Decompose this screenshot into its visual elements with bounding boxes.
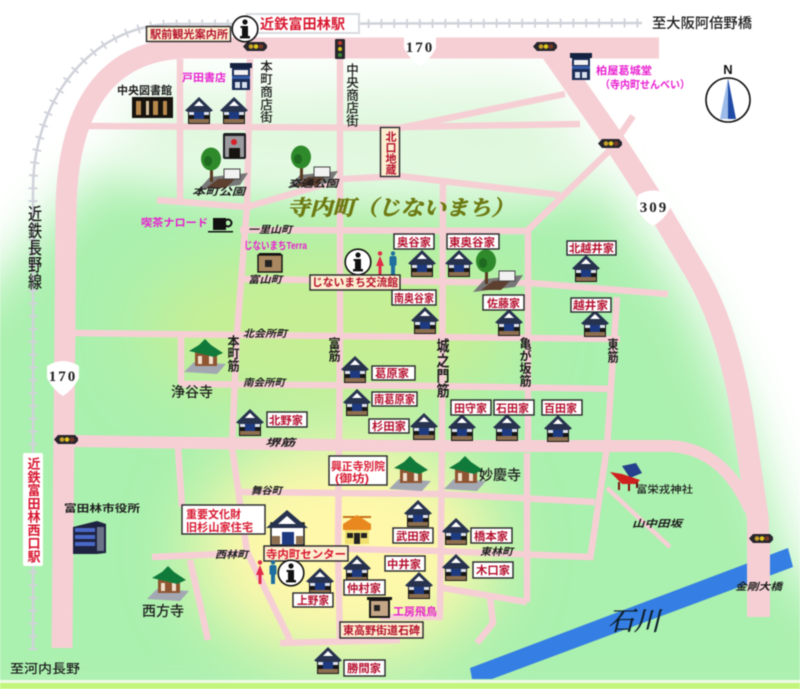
- cafe: [141, 216, 233, 232]
- street labels: central blocks: 富筋: [327, 336, 341, 363]
- road network: [62, 48, 758, 648]
- label: Nakai: 中井家: [387, 557, 421, 571]
- icon: information, exchange hall: [345, 249, 371, 275]
- park: Kotsu park: 交通公園: [288, 178, 340, 190]
- label: Minami Kuzuhara: 南葛原家: [374, 392, 415, 406]
- label: Nakai: [385, 556, 425, 571]
- label: Hashimoto: 橋本家: [474, 529, 508, 543]
- houses: [185, 97, 609, 674]
- label: Tamori: 田守家: [454, 401, 487, 415]
- street labels: central blocks: 南会所町: [243, 377, 287, 389]
- park near Higashi Okutani house: [473, 250, 523, 292]
- label: Higashi Okutani: [447, 234, 499, 249]
- station label: Tondabayashi-nishiguchi: [23, 453, 43, 566]
- route shield 170 top: [404, 32, 436, 66]
- shop: Toda bookstore: 戸田書店: [182, 71, 227, 84]
- library: [117, 83, 173, 118]
- label: Katsuma: [344, 660, 385, 676]
- shop: Kashiwaya: 柏屋葛城堂: [596, 64, 652, 77]
- traffic signals: [54, 39, 773, 543]
- shop: Kashiwaya: [570, 53, 690, 91]
- street labels: central blocks: 東林町: [480, 546, 515, 558]
- label: Sato: [483, 295, 524, 310]
- title: 寺内町（じないまち）: [287, 196, 514, 220]
- shrine: Tomiebisu: 富栄戎神社: [636, 483, 693, 496]
- label: Ishida: 石田家: [496, 401, 529, 415]
- label: Sato: 佐藤家: [487, 296, 520, 310]
- library: 中央図書館: [117, 83, 172, 97]
- park: Kotsu park: [288, 146, 340, 190]
- shrine: Tomiebisu: [610, 463, 693, 496]
- label: former Sugiyama residence: 旧杉山家住宅: [186, 520, 253, 534]
- temples: Koshoji and Myokeiji: [389, 456, 486, 491]
- temple: Saihoji: 西方寺: [142, 603, 184, 619]
- icon: restrooms, center: [256, 560, 276, 584]
- label: Higashi Koya road stone: 東高野街道石碑: [343, 623, 420, 637]
- bridge label: Kongo bridge: 金剛大橋: [735, 581, 784, 593]
- icon: information, center: [278, 560, 304, 586]
- temple: Jokokuji: [171, 339, 226, 400]
- label: Okutani: 奥谷家: [397, 235, 431, 249]
- label: Hashimoto: [471, 528, 512, 543]
- label: Katsuma: 勝間家: [347, 661, 381, 675]
- destination: Kawachinagano: 至河内長野: [10, 661, 81, 676]
- icon: information, station: [232, 16, 258, 42]
- temple: Saihoji: [142, 566, 189, 619]
- label: Kiguchi: 木口家: [476, 563, 510, 577]
- label: Kitano: [267, 412, 307, 427]
- label: Minami Okutani: 南奥谷家: [394, 291, 434, 305]
- river label: Ishikawa: 石川: [608, 607, 663, 636]
- destination: Osaka Abenobashi: 至大阪阿倍野橋: [652, 15, 752, 31]
- label: Sugita: 杉田家: [372, 419, 406, 433]
- slope label: Yamanakada: 山中田坂: [632, 518, 684, 530]
- label: Koshoji betsuin: [329, 456, 387, 485]
- label: north gate jizo: [380, 128, 400, 176]
- city hall: [64, 502, 140, 554]
- name labels: houses: [267, 234, 616, 676]
- cafe: 喫茶ナロード: [141, 216, 208, 229]
- compass north arrow: [706, 62, 750, 122]
- label: Nakamura: [344, 580, 385, 595]
- label: Ishida: [494, 400, 534, 415]
- label: Higashi Koya road stone: [340, 622, 423, 638]
- park: Honmachi park: 本町公園: [192, 186, 248, 198]
- station name: Kintetsu Tondabayashi: 近鉄富田林駅: [260, 16, 345, 32]
- station tourist information label: 駅前観光案内所: [150, 27, 228, 41]
- municipal building: [223, 133, 246, 159]
- temple label: Myokeiji: 妙慶寺: [479, 467, 521, 483]
- street labels: central blocks: 北会所町: [243, 328, 289, 340]
- label: Kuzuhara: [372, 366, 415, 380]
- label: Kiguchi: [473, 562, 513, 578]
- label: Ueno: 上野家: [297, 593, 329, 607]
- park: Honmachi park: [192, 148, 248, 198]
- Jinaimachi Terra: [244, 240, 307, 272]
- street label: Chuo shopping street: 中央商店街: [344, 62, 358, 128]
- label: Nakamura: 仲村家: [347, 581, 381, 595]
- sakai-suji road: [70, 441, 750, 510]
- label: Takeda: [393, 528, 433, 543]
- label: Okutani: [394, 234, 434, 249]
- route shield 309: [637, 190, 670, 226]
- label: north gate jizo: 北口地蔵: [384, 131, 396, 176]
- street label: Honmachi shopping street: 本町商店街: [258, 60, 272, 124]
- label: Koshoji betsuin: 興正寺別院: [331, 459, 385, 473]
- label: former Sugiyama residence: [182, 505, 265, 534]
- label: Kita Koshii: 北越井家: [569, 241, 614, 255]
- side streets: [72, 59, 670, 643]
- station label: Tondabayashi-nishiguchi: 近鉄富田林西口駅: [26, 456, 40, 564]
- label: Tamori: [451, 400, 491, 415]
- street labels: central blocks: 本町筋: [226, 334, 240, 373]
- label: Kitano: 北野家: [269, 413, 303, 427]
- label: former Sugiyama residence: 重要文化財: [186, 507, 241, 521]
- icon: restrooms: [376, 251, 396, 275]
- label: Koshoji betsuin: (御坊): [335, 471, 369, 485]
- main roads: [62, 48, 758, 648]
- label: Momota: 百田家: [544, 401, 577, 415]
- street labels: central blocks: [215, 328, 618, 561]
- bottom band: [0, 680, 800, 689]
- Jinaimachi Terra: じないまちTerra: [244, 240, 307, 252]
- shop: Kashiwaya: （寺内町せんべい）: [600, 78, 690, 91]
- label: Jinaimachi exchange hall: じないまち交流館: [312, 275, 398, 289]
- temple: Jokokuji: 浄谷寺: [171, 384, 213, 400]
- route shield 170 left: [47, 361, 79, 396]
- orange building: [343, 515, 371, 544]
- route shield 170 top: 170: [406, 40, 434, 56]
- city hall: 富田林市役所: [64, 502, 140, 515]
- street labels: central blocks: 東筋: [606, 336, 618, 364]
- label: Higashi Okutani: 東奥谷家: [449, 235, 495, 249]
- route shield 309: 309: [640, 200, 668, 216]
- route shield 170 left: 170: [49, 369, 77, 385]
- street labels: central blocks: 舞谷町: [251, 485, 284, 497]
- street labels: central blocks: 亀が坂筋: [518, 336, 532, 388]
- label: Kuzuhara: 葛原家: [375, 366, 409, 380]
- river: Ishikawa: [470, 540, 793, 679]
- building: former Sugiyama residence: [266, 510, 308, 545]
- station name: Kintetsu Tondabayashi: [247, 14, 359, 33]
- workshop Asuka: 工房飛鳥: [393, 605, 438, 618]
- compass north arrow: N: [723, 62, 733, 77]
- railway line: [33, 23, 642, 650]
- label: Jinaimachi center: 寺内町センター: [266, 547, 346, 561]
- street labels: central blocks: 城之門筋: [434, 337, 450, 400]
- shop: Toda bookstore: [182, 63, 252, 90]
- railway label: Kintetsu Nagano line: 近鉄長野線: [27, 205, 43, 290]
- street labels: central blocks: 西林町: [215, 549, 250, 561]
- label: Koshii: 越井家: [573, 298, 608, 312]
- workshop Asuka: [367, 597, 438, 618]
- label: Takeda: 武田家: [396, 529, 430, 543]
- label: Momota: [542, 400, 582, 415]
- street label: Tomiyama-cho: 富山町: [248, 274, 284, 286]
- street label: Ichiriyama-cho: 一里山町: [248, 224, 294, 236]
- street labels: central blocks: 堺筋: [265, 437, 298, 449]
